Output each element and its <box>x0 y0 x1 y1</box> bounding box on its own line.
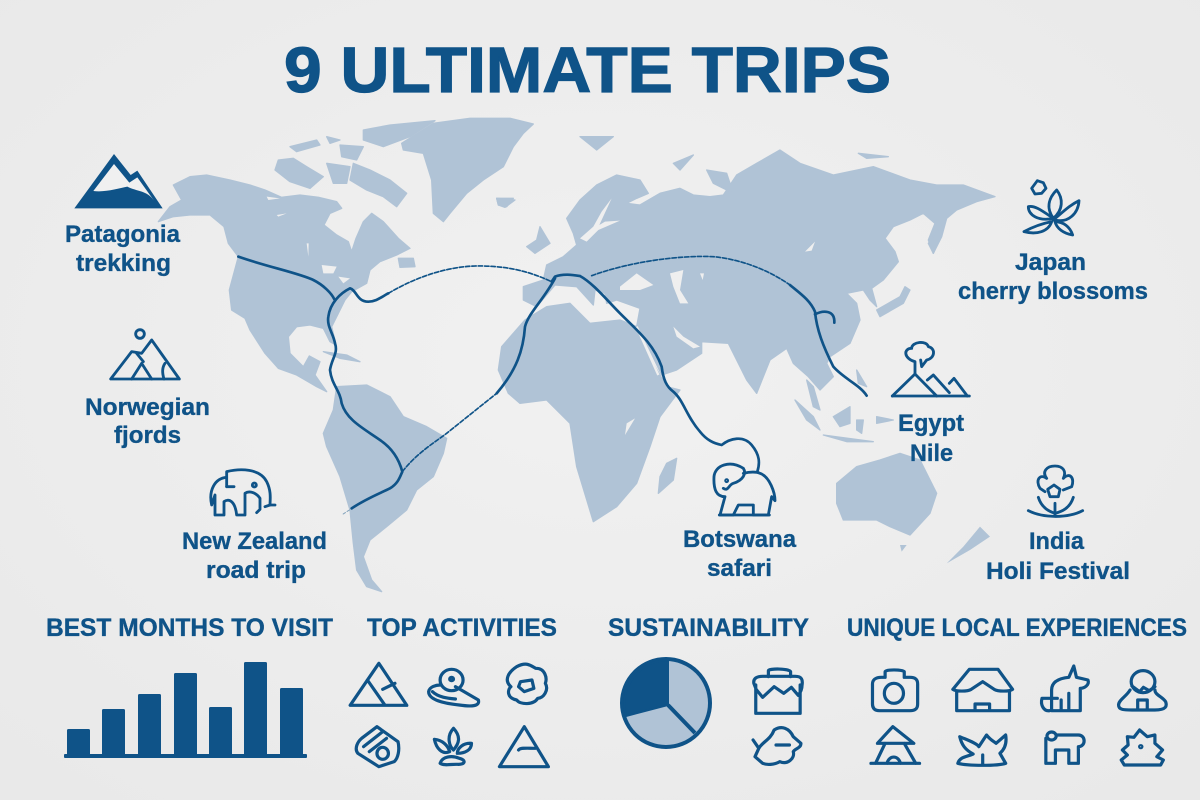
icon: Norwegian mountains <box>111 330 179 379</box>
label: Norwegian fjords: fjords <box>114 422 181 449</box>
label: Norwegian fjords: Norwegian <box>85 394 210 421</box>
label: Patagonia trekking <box>65 221 181 277</box>
heading: best months: BEST MONTHS TO VISIT <box>46 614 333 642</box>
world map <box>158 118 995 592</box>
pie chart: sustainability <box>622 659 710 747</box>
label: New Zealand road trip: New Zealand <box>182 528 327 555</box>
label: New Zealand road trip: road trip <box>206 557 306 584</box>
label: New Zealand road trip <box>182 528 327 584</box>
icon: Japan cherry blossom <box>1024 181 1079 235</box>
icon: New Zealand elephant <box>211 470 275 515</box>
icon: Patagonia mountain <box>74 154 163 208</box>
label: Egypt Nile: Egypt <box>898 410 964 437</box>
label: Japan cherry blossoms: cherry blossoms <box>958 278 1148 305</box>
icon grid: top activities <box>350 663 548 767</box>
route: western Americas <box>238 257 555 514</box>
map: North American lakes <box>267 197 350 283</box>
label: India Holi Festival <box>986 528 1130 585</box>
label: Egypt Nile <box>898 410 964 467</box>
icon: India Holi flower <box>1028 466 1083 516</box>
heading: top activities: TOP ACTIVITIES <box>367 614 557 642</box>
map: inland seas <box>580 198 815 435</box>
label: India Holi Festival: Holi Festival <box>986 558 1130 585</box>
label: Patagonia trekking: trekking <box>76 250 171 277</box>
map: New Zealand and Tasmania <box>900 527 990 563</box>
label: Japan cherry blossoms <box>958 249 1148 305</box>
label: Patagonia trekking: Patagonia <box>65 221 181 248</box>
label: Japan cherry blossoms: Japan <box>1015 249 1086 276</box>
label: Botswana safari <box>683 526 797 582</box>
map: Eurasia, Africa and Oceania <box>497 137 995 535</box>
label: Botswana safari: safari <box>707 555 772 582</box>
icon grid: sustainability <box>753 669 802 764</box>
label: Egypt Nile: Nile <box>910 440 953 467</box>
route: Europe to Asia and Africa <box>552 256 867 472</box>
heading: sustainability: SUSTAINABILITY <box>608 614 809 642</box>
bar chart: best months to visit <box>64 662 307 758</box>
routes <box>238 256 867 514</box>
icon grid: unique local experiences <box>871 666 1166 765</box>
map: Americas and Greenland <box>158 118 533 592</box>
label: Norwegian fjords <box>85 394 210 449</box>
icon: Botswana elephant <box>714 464 775 515</box>
label: India Holi Festival: India <box>1029 528 1085 555</box>
icon: Egypt volcano <box>892 342 969 396</box>
label: Botswana safari: Botswana <box>683 526 797 553</box>
title: 9 ULTIMATE TRIPS <box>284 34 891 106</box>
